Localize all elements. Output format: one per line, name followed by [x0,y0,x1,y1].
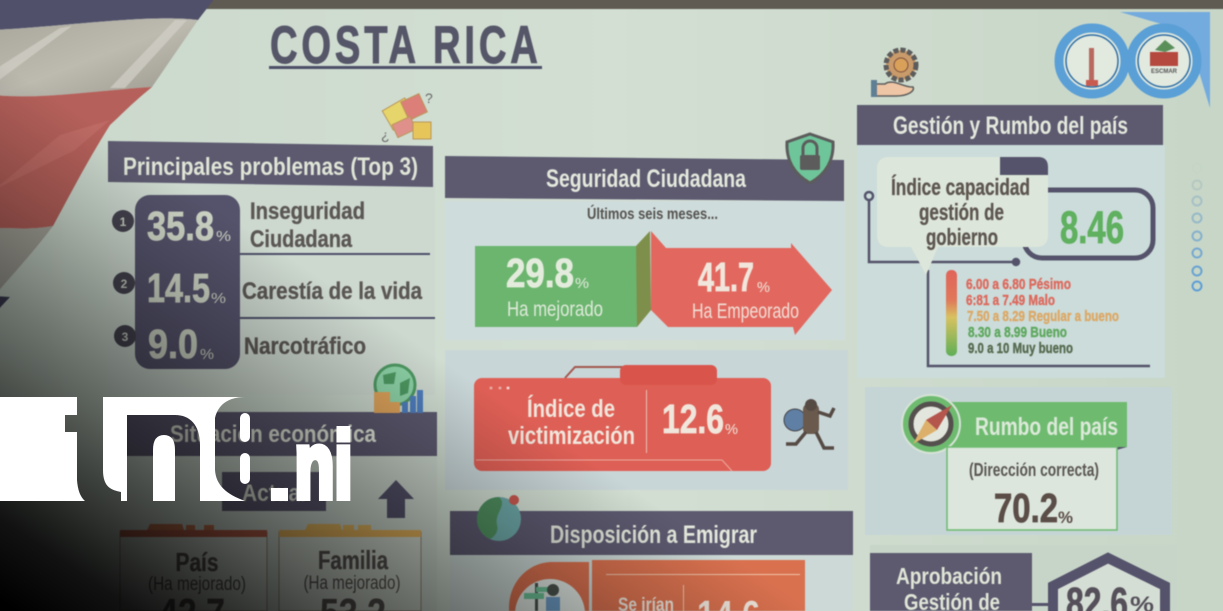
panel: disposición a emigrar [450,511,853,611]
scale legend: 7.50 a 8.29 Regular a bueno [967,308,1119,325]
card: país: (Ha mejorado) [148,574,246,595]
icon: person at signpost [509,562,589,611]
arrow: ha empeorado: Ha Empeorado [692,300,799,323]
icon: puzzle: ¿ [381,127,390,143]
icon: globe with coins [374,365,423,413]
value box: (Dirección correcta) [969,460,1099,480]
scale legend: 9.0 a 10 Muy bueno [968,340,1073,357]
connector [1032,603,1052,606]
value box: % [1058,508,1073,527]
box: ha mejorado: % [575,275,589,292]
scale legend: 6.00 a 6.80 Pésimo [966,276,1071,293]
score box: 8.46 [1060,202,1124,253]
panel: rumbo del país [865,387,1172,535]
callout: índice capacidad: gobierno [926,224,998,250]
hexagon value [1053,558,1165,611]
problem 3: % [200,346,214,363]
heading: situación económica [108,412,437,456]
card: familia: Familia [318,545,388,575]
problem 2: 14.5 [147,265,210,311]
card: familia: (Ha mejorado) [304,573,400,594]
logo: tn8.ni [0,397,352,518]
ribbon heading: Rumbo del país [975,413,1118,441]
heading: seguridad ciudadana [445,156,844,201]
callout: índice capacidad: gestión de [919,199,1004,225]
arrow: ha empeorado: % [757,279,770,296]
box: se irían [592,560,805,611]
pagination dots [1192,164,1202,290]
problem 3 [114,321,366,367]
problem 1: 35.8 [147,203,214,249]
icon: puzzle: ? [425,90,433,106]
scale legend [966,276,1119,357]
score box [1024,190,1153,258]
heading: principales problemas: Principales problemas (Top 3) [123,153,418,181]
callout: índice capacidad: Índice capacidad [891,173,1030,200]
icon: shield with lock [787,134,833,183]
box: ha mejorado: 29.8 [506,250,574,296]
panel: situación económica [108,412,437,611]
panel: índice de victimización: victimización [508,422,635,450]
problem 1: % [216,228,231,245]
gradient scale [946,270,957,356]
icon: thief [784,399,834,448]
problem 1: Ciudadana [250,226,353,253]
panel: índice de victimización [445,350,848,490]
panel: aprobación gestión [870,545,1178,611]
icon: hand with gear [871,50,916,97]
logo: tn8.ni: ni [294,412,352,518]
problem 3: 3 [122,330,129,344]
arrow: ha empeorado: 41.7 [698,254,754,300]
problem 2: Carestía de la vida [242,278,423,305]
panel: índice de victimización: Índice de [527,394,615,423]
arrow: up [378,480,414,518]
card: país: País [176,547,218,577]
heading: situación económica: Situación económica [170,421,377,448]
panel: índice de victimización: 12.6 [662,396,724,442]
logos: ESCMAR [1151,69,1178,75]
box: ha mejorado [475,231,651,327]
problem 1: Inseguridad [250,198,365,225]
title: COSTA RICA [270,15,538,74]
icon: puzzle [381,90,433,143]
problem 3: 9.0 [148,321,198,367]
problem 2: 2 [121,277,128,291]
heading: seguridad ciudadana: Seguridad Ciudadana [546,165,747,193]
callout: índice capacidad [877,157,1048,275]
heading: disposición a emigrar [450,511,853,555]
flag curtain [0,0,218,314]
arrow: ha empeorado [651,231,832,335]
panel: índice de victimización: % [725,421,738,438]
panel: gestión y rumbo del país [857,105,1165,378]
scale legend: 6:81 a 7.49 Malo [966,292,1055,309]
tab: actual: Actual [242,480,306,507]
value box: 70.2 [994,485,1058,531]
scale legend: 8.30 a 8.99 Bueno [968,324,1067,341]
box: ha mejorado: Ha mejorado [507,298,603,321]
panel: principales problemas [108,141,435,395]
label box: Aprobación [896,563,1002,589]
percentage pill [135,195,240,369]
value box [947,447,1117,531]
problem 3: Narcotráfico [244,333,366,360]
icon: globe with pin [477,495,521,541]
heading: gestión y rumbo [857,105,1163,145]
problem 2: % [211,290,226,307]
problem 1: 1 [120,215,127,229]
heading: principales problemas [108,141,433,187]
card: familia [279,524,421,611]
subtitle: Últimos seis meses... [587,204,718,223]
card: país [120,524,267,611]
label box [870,553,1032,611]
problem 2 [113,265,435,319]
tab: actual [222,472,326,511]
connector lines [865,192,1150,366]
logos [1059,12,1210,108]
panel: seguridad ciudadana [445,156,845,340]
heading: disposición a emigrar: Disposición a Emigrar [550,521,757,549]
icon: compass [902,395,960,453]
ribbon heading [950,402,1127,451]
problem 1 [112,198,430,255]
heading: gestión y rumbo: Gestión y Rumbo del país [893,112,1128,140]
